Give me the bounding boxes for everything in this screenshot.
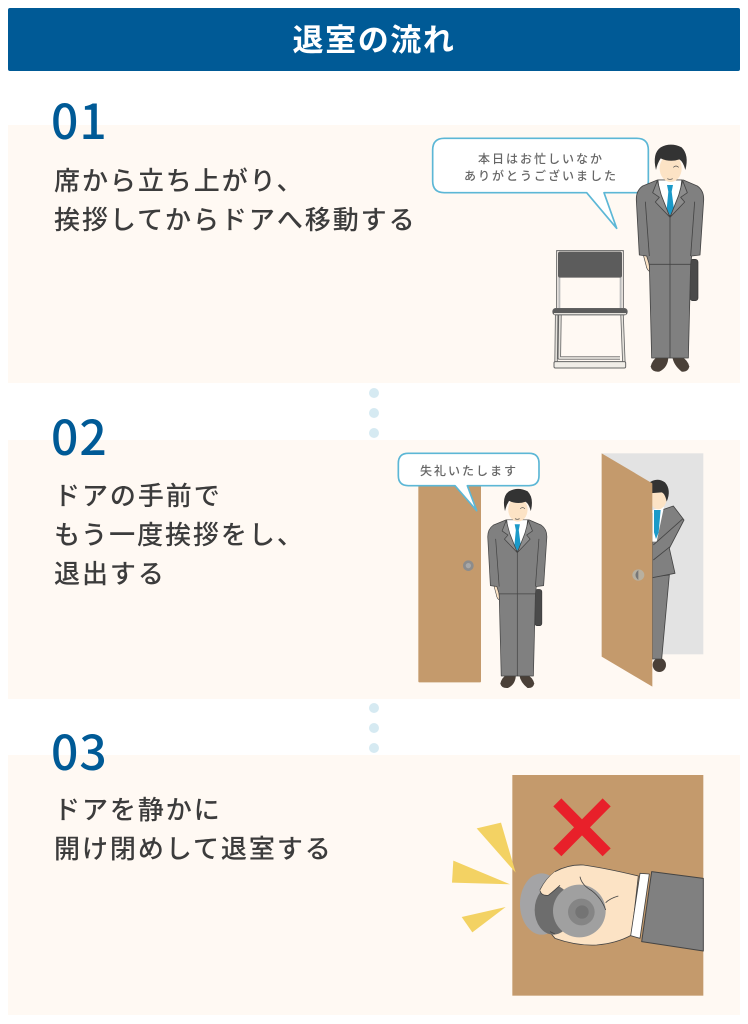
illustration: step 1 — [433, 138, 704, 372]
speech bubble: 失礼いたします — [420, 463, 518, 478]
speech bubble: ありがとうございました — [464, 168, 618, 183]
step 2 text: もう一度挨拶をし、 — [54, 520, 305, 550]
connector dots between step 2 and 3 — [369, 703, 379, 753]
door knob and hand — [520, 865, 703, 951]
panel: step 2 background — [8, 440, 740, 699]
closed door — [418, 482, 481, 682]
step 2 text: ドアの手前で — [54, 481, 222, 511]
title: 退室の流れ — [292, 23, 456, 58]
noise marks — [452, 823, 516, 932]
panel: step 1 background — [8, 125, 740, 383]
speech bubble: 本日はお忙しいなか — [478, 152, 604, 166]
speech bubble — [433, 138, 648, 228]
step number 03: 03 — [51, 714, 108, 784]
open door with man behind — [602, 453, 703, 687]
panel: step 3 background — [8, 755, 740, 1015]
illustration: step 3 door knob — [452, 775, 703, 996]
step number 02: 02 — [51, 399, 108, 469]
step 1 text: 挨拶してからドアへ移動する — [54, 205, 417, 235]
door surface — [512, 775, 703, 996]
speech bubble — [398, 453, 539, 511]
title bar — [8, 8, 740, 71]
step number 01: 01 — [51, 83, 108, 153]
icon: red cross — [557, 802, 607, 852]
man bowing at door — [488, 489, 547, 688]
man bowing — [636, 145, 704, 372]
step 3 text: ドアを静かに — [54, 795, 222, 825]
illustration: step 2 — [398, 453, 703, 688]
step 1 text: 席から立ち上がり、 — [54, 166, 305, 196]
step 3 text: 開け閉めして退室する — [54, 834, 333, 864]
chair — [553, 251, 627, 368]
step 2 text: 退出する — [54, 559, 166, 589]
connector dots between step 1 and 2 — [369, 388, 379, 438]
